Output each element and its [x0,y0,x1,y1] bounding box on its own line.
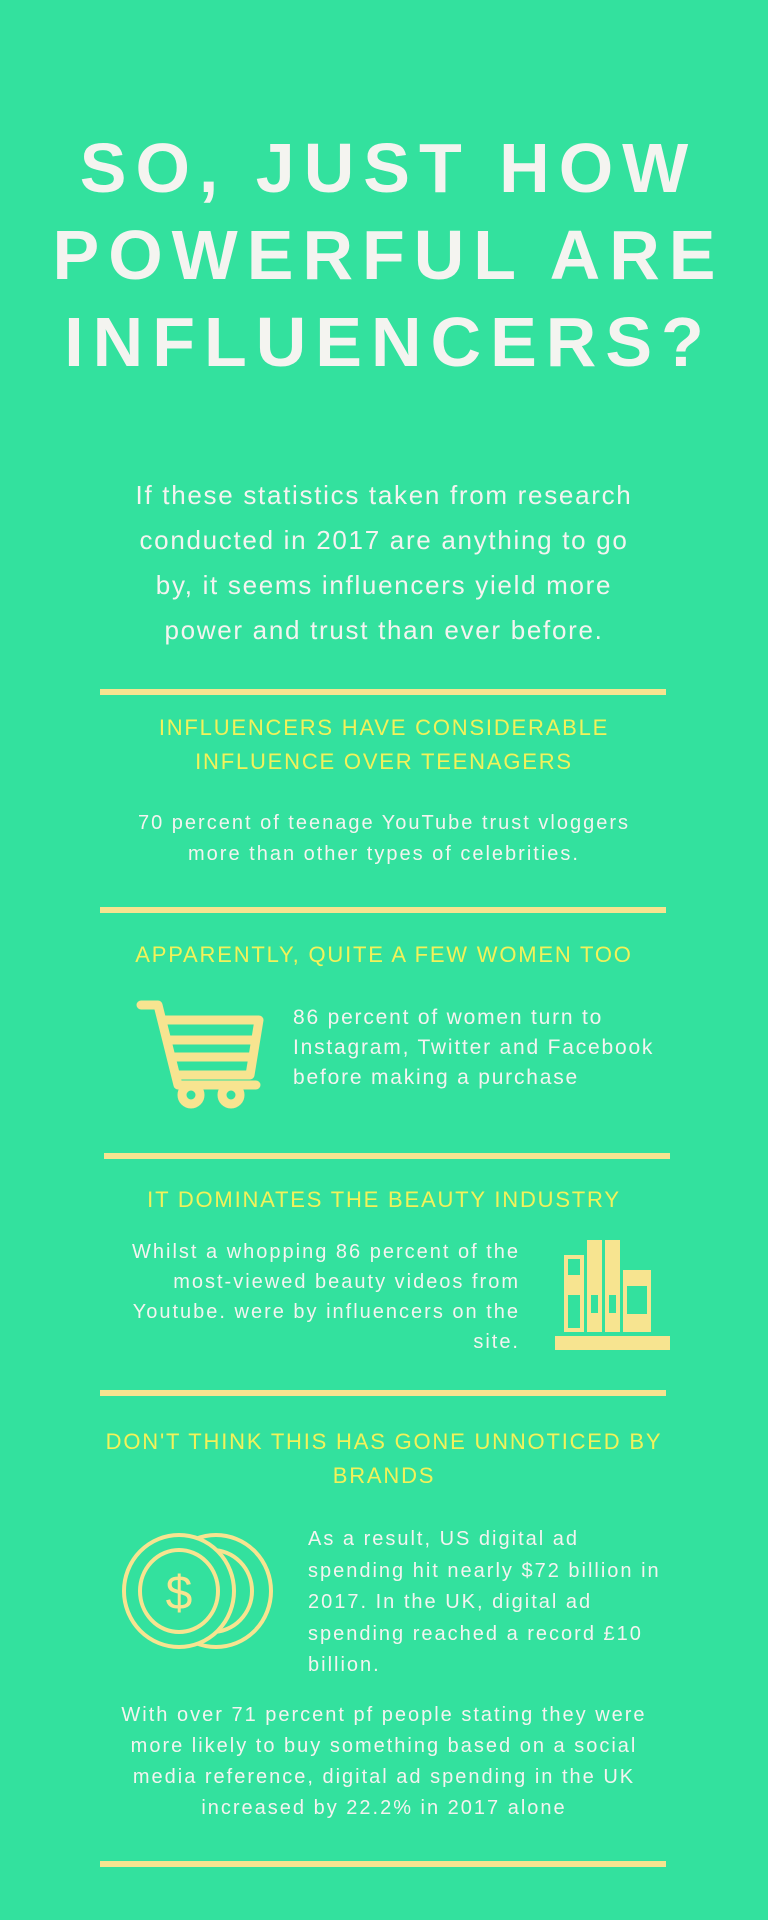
icon: coins: $ [166,1567,192,1620]
heading: women: APPARENTLY, QUITE A FEW WOMEN TOO [135,942,633,967]
heading: brands: BRANDS [333,1463,435,1488]
title: POWERFUL ARE [53,216,724,294]
text: teenagers [138,812,630,865]
intro text: power and trust than ever before. [164,615,604,645]
title [53,129,724,381]
intro text [136,480,632,645]
text: ad spending: billion. [308,1654,381,1676]
title: SO, JUST HOW [80,129,697,207]
text: ad spending: 2017. In the UK, digital ad [308,1591,592,1613]
text: ad spending: As a result, US digital ad [308,1528,579,1550]
text: women: Instagram, Twitter and Facebook [293,1036,654,1059]
intro text: conducted in 2017 are anything to go [139,525,629,555]
title: INFLUENCERS? [64,303,713,381]
heading: brands [106,1429,662,1488]
intro text: If these statistics taken from research [136,480,632,510]
text: social media [121,1704,647,1819]
icon: coins [122,1533,273,1649]
text: social media: increased by 22.2% in 2017 alone [201,1797,567,1819]
text: teenagers: 70 percent of teenage YouTube trust vloggers [138,812,630,834]
text: ad spending [308,1528,661,1676]
icon: shopping cart [136,1000,264,1108]
text: beauty [132,1241,520,1353]
text: women: 86 percent of women turn to [293,1006,603,1029]
text: beauty: Youtube. were by influencers on the [133,1301,520,1323]
icon: books [555,1240,670,1350]
text: women: before making a purchase [293,1066,579,1089]
text: social media: media reference, digital ad spending in the UK [133,1766,635,1788]
text: social media: With over 71 percent pf people stating they were [121,1704,647,1726]
heading: teenagers: INFLUENCE OVER TEENAGERS [195,749,573,774]
text: social media: more likely to buy something based on a social [131,1735,637,1757]
text: women [293,1006,654,1089]
heading: beauty: IT DOMINATES THE BEAUTY INDUSTRY [147,1187,621,1212]
text: beauty: most-viewed beauty videos from [173,1271,520,1293]
text: teenagers: more than other types of celebrities. [188,843,580,865]
text: ad spending: spending reached a record £10 [308,1622,643,1644]
heading: teenagers [159,715,609,774]
heading: brands: DON'T THINK THIS HAS GONE UNNOTICED BY [106,1429,662,1454]
text: ad spending: spending hit nearly $72 billion in [308,1560,661,1582]
text: beauty: site. [473,1331,520,1353]
intro text: by, it seems influencers yield more [156,570,612,600]
text: beauty: Whilst a whopping 86 percent of the [132,1241,520,1263]
heading: teenagers: INFLUENCERS HAVE CONSIDERABLE [159,715,609,740]
